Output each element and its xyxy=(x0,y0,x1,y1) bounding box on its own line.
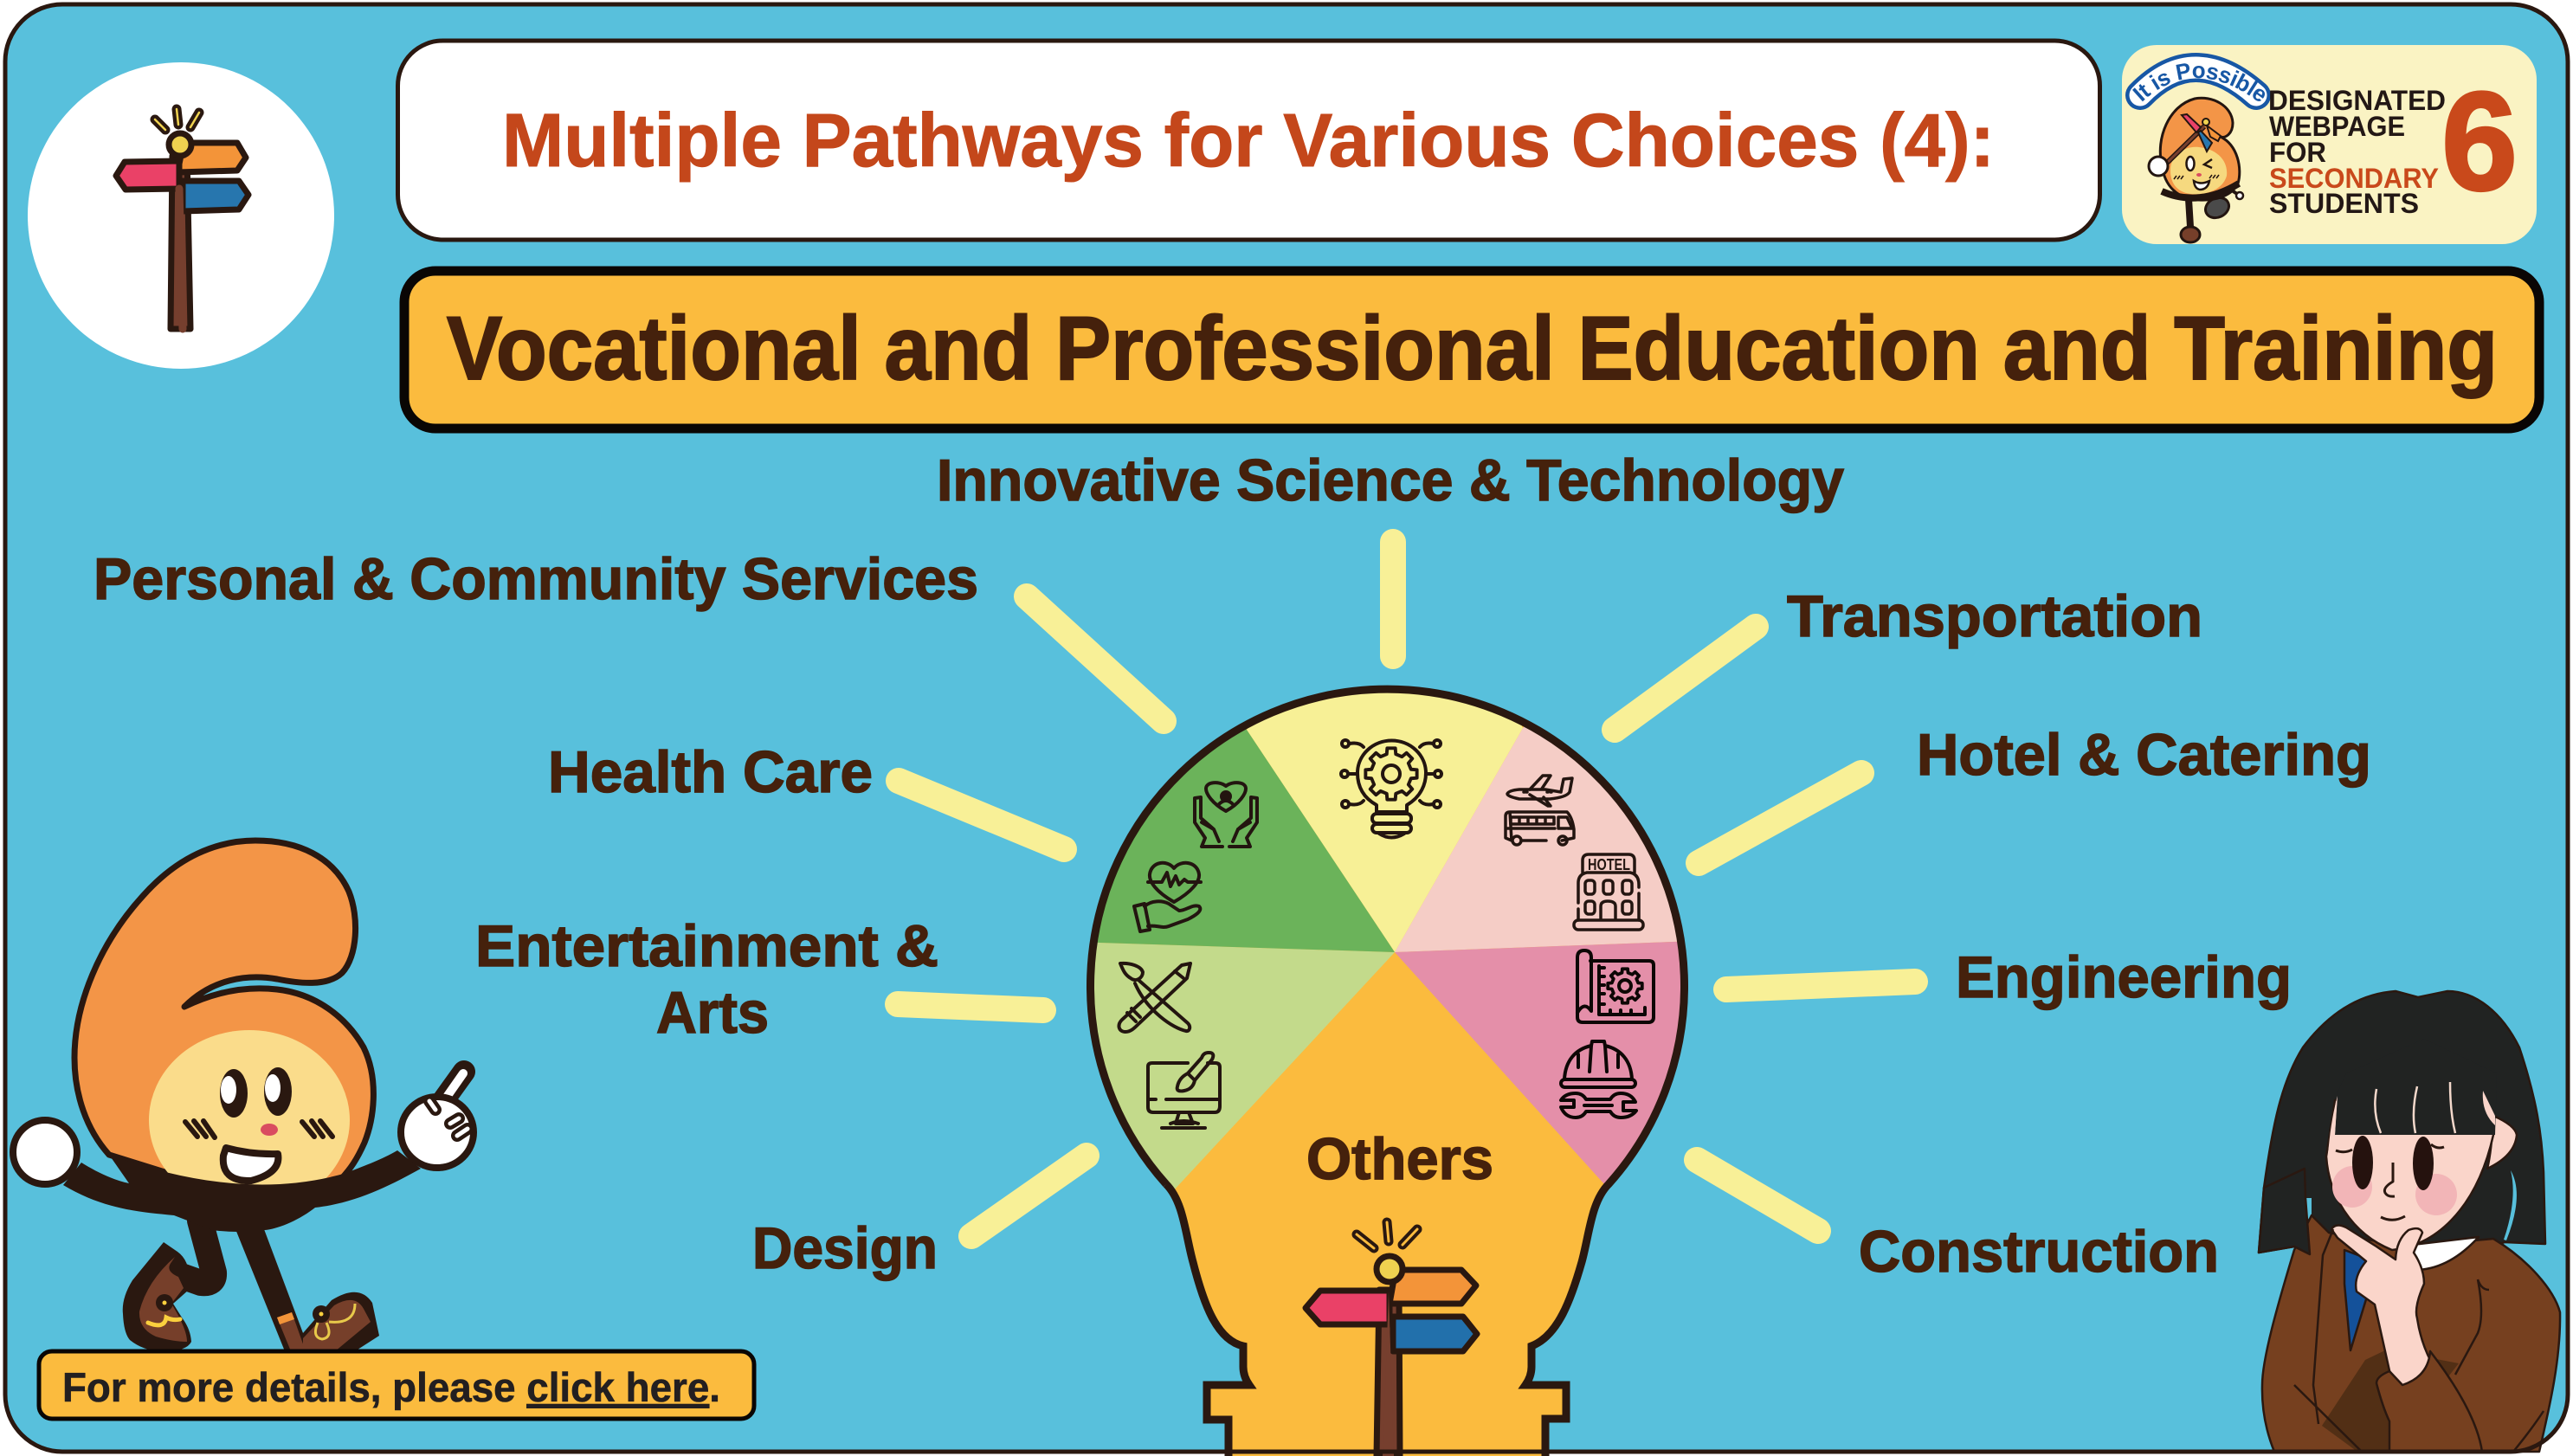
category labels: Arts xyxy=(656,980,769,1046)
jacket lines xyxy=(2294,1229,2544,1452)
collar xyxy=(2398,1237,2479,1270)
badge arc: It is Possible: It is Possible xyxy=(2132,63,2265,102)
category labels: Hotel & Catering xyxy=(1917,722,2371,788)
badge text: WEBPAGE xyxy=(2269,111,2405,142)
icon: crossed brush and pencil xyxy=(1119,963,1190,1032)
mascot mouth xyxy=(223,1148,278,1181)
category labels: Entertainment & xyxy=(475,913,938,979)
jacket shadow xyxy=(2322,1350,2459,1452)
badge: designated webpage xyxy=(2122,45,2537,244)
category labels: Personal & Community Services xyxy=(94,546,978,612)
subtitle banner xyxy=(404,271,2539,428)
category labels: Design xyxy=(752,1215,938,1281)
rays around lightbulb xyxy=(898,542,1915,1236)
label: Others: Others xyxy=(1306,1126,1493,1192)
icon: plane xyxy=(1507,776,1572,806)
category labels: Construction xyxy=(1859,1219,2219,1285)
logo: white circle with signpost xyxy=(28,62,334,369)
student girl thinking xyxy=(2259,991,2560,1452)
face xyxy=(2326,1092,2493,1250)
icon: heart in hand with pulse xyxy=(1134,863,1201,931)
category labels: Engineering xyxy=(1956,944,2292,1010)
hair gaps xyxy=(2305,1170,2517,1240)
icon: helmet and wrench xyxy=(1561,1041,1636,1118)
fringe xyxy=(2335,1039,2497,1135)
icon: signpost in bulb xyxy=(1306,1222,1477,1456)
badge number 6: 6 xyxy=(2441,63,2518,220)
hair xyxy=(2259,991,2545,1254)
mascot legs xyxy=(123,1221,379,1351)
icon: bus xyxy=(1506,812,1574,845)
badge text: DESIGNATED xyxy=(2268,85,2446,116)
icon: innovative technology lightbulb gear xyxy=(1341,740,1441,838)
mascot left hand xyxy=(13,1120,77,1184)
title box xyxy=(398,41,2100,240)
badge text: SECONDARY xyxy=(2269,163,2439,194)
icon: blueprint with gear xyxy=(1577,950,1654,1022)
category labels: Innovative Science & Technology xyxy=(937,448,1844,513)
mascot eyes xyxy=(220,1067,292,1118)
necktie xyxy=(2344,1250,2370,1350)
category labels: Health Care xyxy=(548,739,873,805)
mascot right hand pointing xyxy=(401,1072,474,1168)
mascot face xyxy=(149,1030,350,1184)
lightbulb pie chart xyxy=(1087,686,1688,1456)
cheeks xyxy=(2332,1166,2457,1215)
mascot: orange number six xyxy=(13,841,474,1351)
badge text: FOR xyxy=(2269,137,2326,168)
badge mascot xyxy=(2149,98,2243,242)
mascot head xyxy=(74,841,373,1199)
mascot nose xyxy=(261,1124,278,1136)
lashes nose mouth xyxy=(2336,1144,2444,1220)
sleeve xyxy=(2376,1351,2482,1452)
title box: Multiple Pathways for Various Choices (4): xyxy=(502,99,1995,183)
ear xyxy=(2487,1116,2517,1169)
badge text xyxy=(2268,85,2446,219)
icon: caring hands with heart xyxy=(1195,783,1257,847)
hand on chin xyxy=(2331,1225,2431,1385)
icon: hotel building: HOTEL xyxy=(1588,856,1630,873)
category labels xyxy=(94,448,2371,1285)
button: for more details: For more details, please click here. xyxy=(62,1364,720,1410)
uniform jacket xyxy=(2262,1215,2560,1452)
eyes xyxy=(2352,1136,2434,1190)
icon: hotel building xyxy=(1574,854,1643,930)
button: for more details xyxy=(39,1351,754,1419)
front hair lock xyxy=(2259,1169,2310,1254)
mascot cheeks xyxy=(185,1121,332,1137)
badge text: STUDENTS xyxy=(2269,188,2419,219)
category labels: Transportation xyxy=(1787,583,2202,649)
fringe strand lines xyxy=(2375,1082,2455,1133)
mascot body and arms xyxy=(63,1150,421,1232)
icon: monitor with brush xyxy=(1148,1053,1220,1128)
